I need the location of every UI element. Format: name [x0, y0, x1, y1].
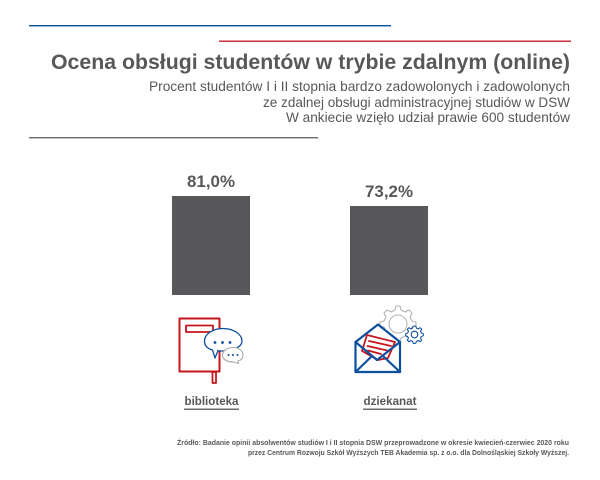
- icon: book with speech bubbles: [180, 318, 243, 383]
- title: Ocena obsługi studentów w trybie zdalnym (online): [51, 50, 570, 74]
- bar: dziekanat: [350, 206, 428, 295]
- value: dziekanat: 73,2%: [365, 182, 413, 201]
- label: biblioteka: biblioteka: [184, 396, 239, 408]
- source note: Źródło: Badanie opinii absolwentów studiów I i II stopnia DSW przeprowadzone w okresie kwiecień-czerwiec 2020 roku: [177, 438, 569, 447]
- subtitle: Procent studentów I i II stopnia bardzo zadowolonych i zadowolonych: [149, 78, 570, 94]
- label: dziekanat: dziekanat: [364, 396, 417, 408]
- bar: biblioteka: [172, 196, 250, 295]
- value: biblioteka: 81,0%: [187, 172, 235, 191]
- subtitle: [149, 78, 571, 125]
- source note: [177, 438, 569, 457]
- icon: envelope with gears: [356, 306, 423, 372]
- subtitle: W ankiecie wzięło udział prawie 600 studentów: [286, 109, 571, 125]
- subtitle: ze zdalnej obsługi administracyjnej studiów w DSW: [263, 94, 571, 110]
- bar chart: [172, 172, 428, 295]
- source note: przez Centrum Rozwoju Szkół Wyższych TEB Akademia sp. z o.o. dla Dolnośląskiej Szkoły Wyższej.: [248, 448, 569, 457]
